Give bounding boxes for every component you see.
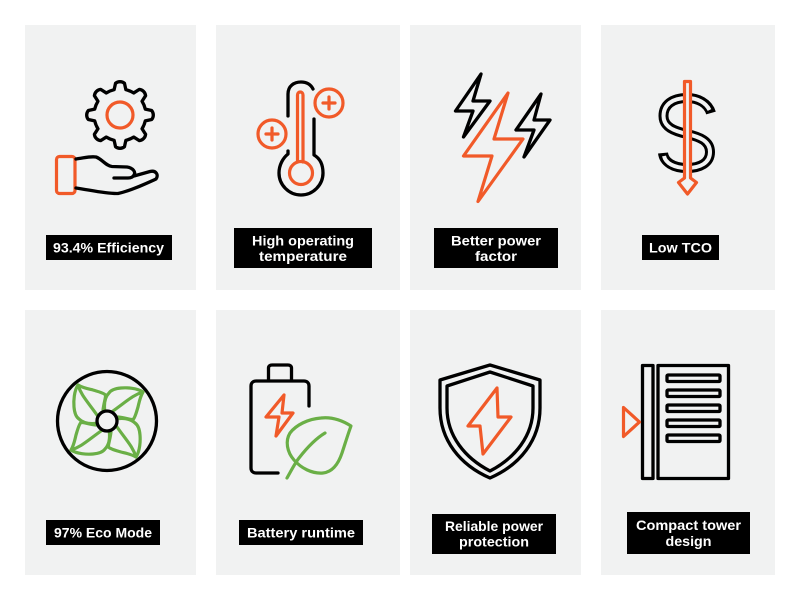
label: Compact tower <box>636 517 742 533</box>
panel: Reliable power protection <box>410 310 581 575</box>
label <box>642 235 719 260</box>
icon: battery with leaf <box>251 365 351 478</box>
icon: gear on open hand <box>56 82 157 194</box>
label: High operating <box>252 232 354 248</box>
label: Battery runtime <box>247 524 355 540</box>
panel: Compact tower design <box>601 310 775 575</box>
icon: thermometer with plus signs <box>258 82 343 195</box>
panel: 97% Eco Mode <box>25 310 196 575</box>
icon: lightning bolts <box>456 74 550 202</box>
label: 97% Eco Mode <box>54 524 152 540</box>
panel: High operating temperature <box>216 25 400 290</box>
label <box>234 228 372 268</box>
icon: tower unit with arrow <box>624 366 728 478</box>
label <box>434 228 558 268</box>
label <box>46 520 160 545</box>
label: temperature <box>259 248 347 264</box>
icon: shield with bolt <box>440 365 540 478</box>
panel: Low TCO <box>601 25 775 290</box>
panel: Better power factor <box>410 25 581 290</box>
panel: Battery runtime <box>216 310 400 575</box>
label <box>627 512 750 554</box>
label: protection <box>459 534 529 550</box>
icon: leaf fan <box>58 372 156 470</box>
label: Reliable power <box>445 518 544 534</box>
label <box>432 514 556 554</box>
label: factor <box>475 248 518 264</box>
panel: 93.4% Efficiency <box>25 25 196 290</box>
label: 93.4% Efficiency <box>53 240 164 256</box>
label <box>46 235 172 260</box>
icon: dollar sign with down arrow <box>663 82 711 194</box>
label: Low TCO <box>649 240 712 256</box>
label <box>239 520 363 545</box>
label: design <box>666 533 712 549</box>
label: Better power <box>451 232 542 248</box>
